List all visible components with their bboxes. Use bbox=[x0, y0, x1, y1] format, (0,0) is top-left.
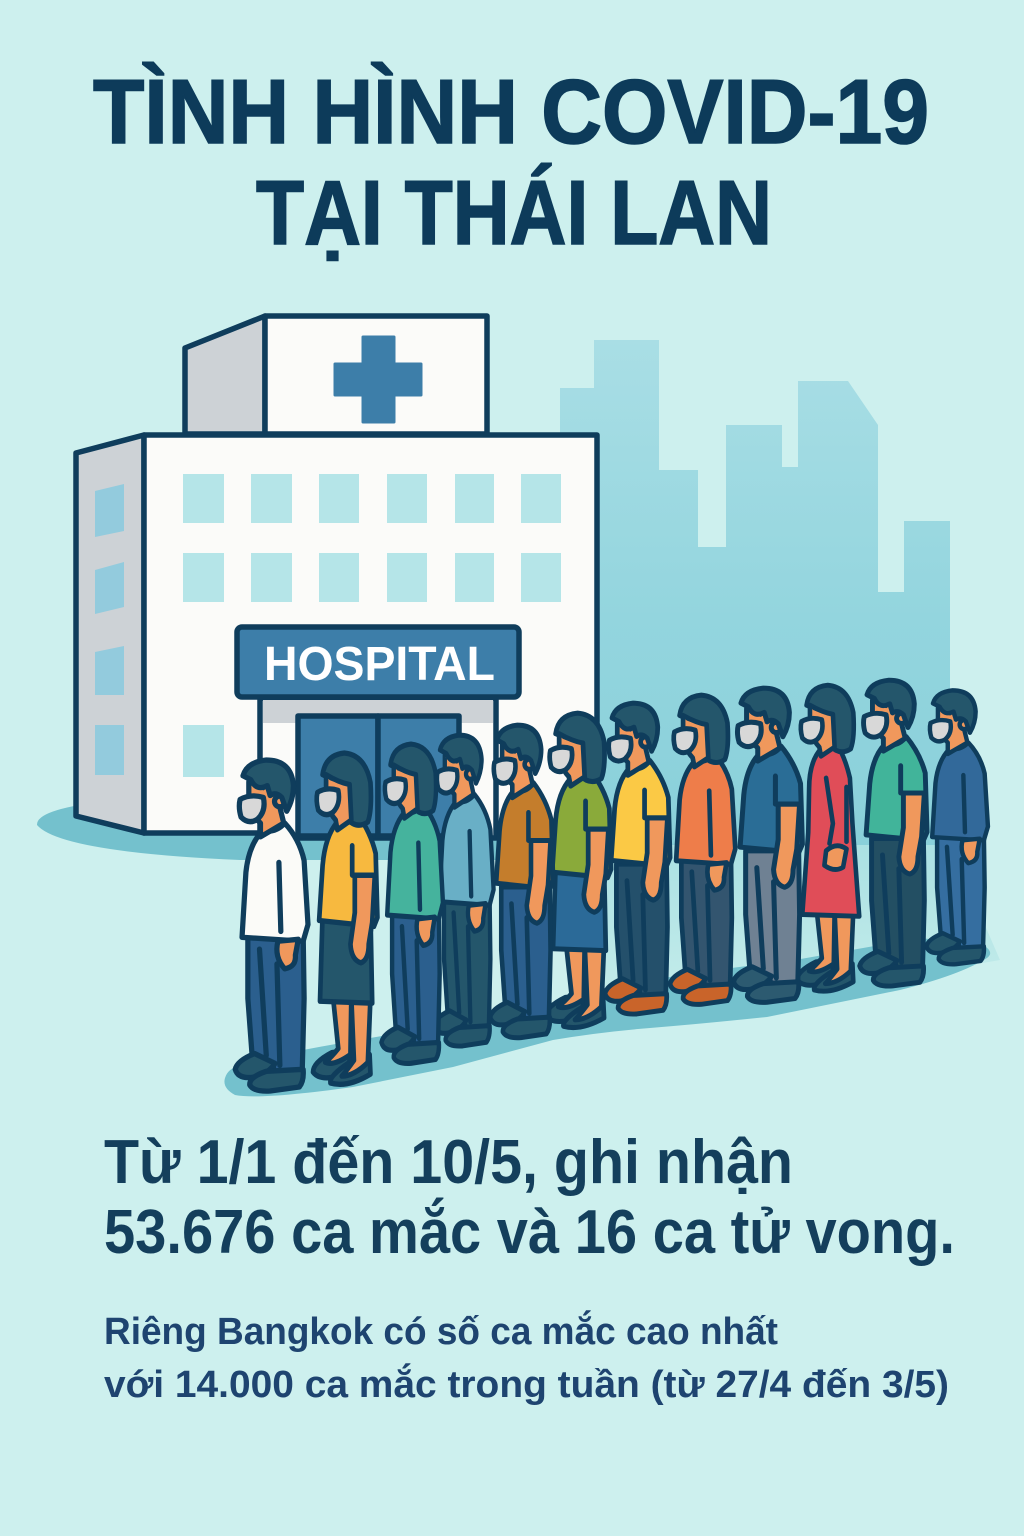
Bangkok note bbox=[104, 1309, 949, 1406]
person 8: orange top bbox=[670, 695, 735, 1004]
person 2: yellow tee and dark skirt bbox=[313, 753, 377, 1084]
queue of masked people bbox=[235, 680, 988, 1091]
queue ground shadow bbox=[224, 938, 990, 1096]
hospital sign bbox=[237, 627, 519, 697]
Bangkok note: với 14.000 ca mắc trong tuần (từ 27/4 đến 3/5) bbox=[104, 1362, 949, 1406]
person 11: teal polo bbox=[860, 680, 927, 986]
title: TÌNH HÌNH COVID-19 bbox=[93, 62, 929, 163]
main block bbox=[76, 435, 597, 833]
person 7: yellow tee bbox=[605, 703, 670, 1014]
entrance bbox=[260, 698, 496, 838]
Bangkok note: Riêng Bangkok có số ca mắc cao nhất bbox=[104, 1309, 778, 1353]
skyline bbox=[560, 340, 1000, 1030]
side windows bbox=[95, 484, 124, 775]
hospital sign: HOSPITAL bbox=[264, 638, 495, 691]
person 4: light blue long sleeves bbox=[434, 735, 494, 1046]
title bbox=[93, 62, 929, 264]
title: TẠI THÁI LAN bbox=[256, 163, 772, 264]
icon: medical cross bbox=[335, 337, 421, 422]
person 5: brown tee bbox=[490, 725, 553, 1038]
person 6: green tee and blue skirt bbox=[546, 713, 611, 1028]
person 12: navy long sleeves bbox=[926, 690, 988, 964]
person 3: green long sleeves bbox=[381, 744, 443, 1063]
person 1: white shirt bbox=[235, 760, 308, 1091]
person 10: red dress bbox=[797, 685, 859, 991]
headline statistics: Từ 1/1 đến 10/5, ghi nhận bbox=[104, 1128, 793, 1197]
front windows bbox=[183, 474, 561, 777]
roof block bbox=[185, 316, 487, 434]
headline statistics bbox=[104, 1128, 955, 1267]
hospital building bbox=[76, 316, 597, 838]
doors bbox=[298, 716, 459, 836]
person 9: blue tee and grey trousers bbox=[734, 688, 802, 1002]
headline statistics: 53.676 ca mắc và 16 ca tử vong. bbox=[104, 1198, 955, 1267]
hospital ground shadow bbox=[37, 802, 620, 860]
